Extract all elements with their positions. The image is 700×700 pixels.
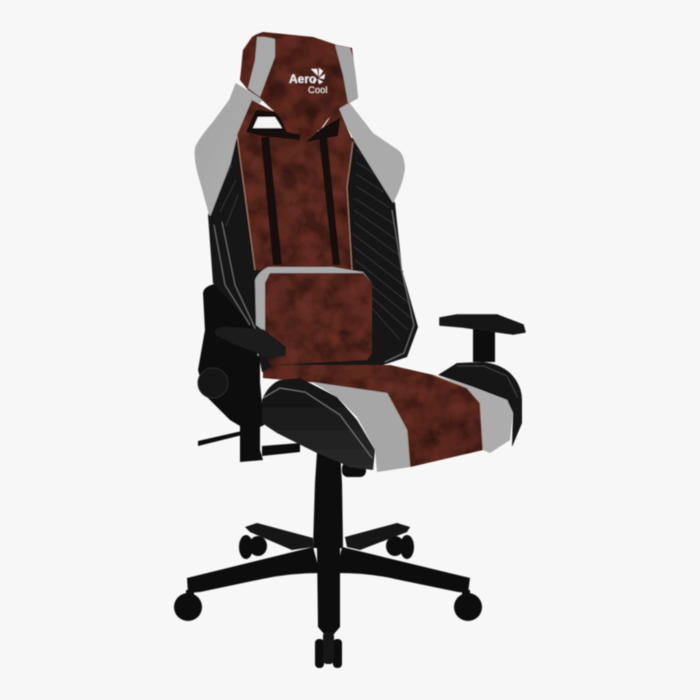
recline knob (198, 368, 228, 398)
front centre caster (315, 632, 342, 668)
rear casters (239, 535, 414, 559)
recline mechanism and side panel (198, 283, 366, 477)
lumbar pillow (255, 267, 376, 368)
front left leg (187, 547, 320, 593)
seat support bar (262, 443, 300, 456)
pillow grey edge (255, 267, 372, 332)
front left caster (174, 590, 202, 621)
left shoulder strap (261, 137, 282, 265)
gas lift column (313, 452, 343, 548)
headrest strap opening (246, 110, 340, 142)
right shoulder strap (319, 137, 340, 265)
rear left leg (245, 523, 313, 550)
right armrest post (473, 326, 495, 362)
seat cushion (260, 362, 522, 472)
left grey seat panel (312, 382, 410, 472)
right armrest pad (440, 315, 525, 334)
front right leg (336, 547, 470, 593)
panel seam highlights (237, 135, 353, 270)
AeroCool logo: Cool (308, 85, 328, 96)
pillow brown face (265, 273, 372, 365)
AeroCool logo: Aero (289, 72, 316, 86)
piping stitches (214, 210, 414, 362)
left armrest (216, 327, 285, 462)
recline lever (198, 431, 242, 446)
front right caster (454, 590, 482, 621)
rear right leg (345, 523, 410, 550)
right grey seat panel (437, 375, 513, 453)
rib lines (218, 150, 411, 340)
seat mottling (260, 362, 486, 470)
headrest mottling (240, 32, 354, 135)
right grey wing (330, 98, 405, 203)
left grey wing (195, 84, 262, 215)
panel mottling (238, 101, 352, 270)
pillow mottling (265, 273, 372, 366)
headrest left grey panel (248, 37, 275, 97)
five-star base (174, 452, 482, 668)
brown centre strip (263, 365, 483, 467)
seat underside mount (342, 462, 366, 477)
seat back (195, 84, 418, 372)
left armrest post (240, 343, 263, 462)
headrest (238, 30, 360, 137)
right armrest (440, 315, 525, 362)
AeroCool logo (289, 68, 328, 96)
black back shell (208, 130, 418, 372)
centre brown panel (237, 100, 353, 270)
gaming chair illustration (173, 31, 526, 669)
left armrest pad (216, 327, 285, 358)
front centre leg (317, 545, 340, 635)
right bolster (438, 362, 522, 447)
left bolster (262, 378, 375, 470)
logo fan icon (311, 68, 325, 84)
headrest right grey panel (335, 45, 358, 103)
